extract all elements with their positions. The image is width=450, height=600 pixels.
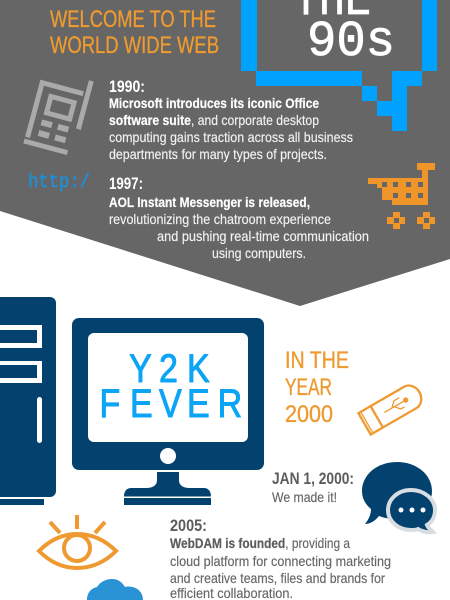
icon: eye xyxy=(39,515,116,568)
text block: 1990: Microsoft introduces its iconic Office xyxy=(109,95,319,111)
icon: monitor with Y2K fever screen xyxy=(72,318,264,505)
text block: 1997 xyxy=(109,174,369,261)
speech bubble: the 90s: 90s xyxy=(307,14,395,71)
screen title: Y2K fever: FEVER xyxy=(99,380,242,426)
icon: cloud xyxy=(87,579,143,600)
text block: 1997: using computers. xyxy=(212,245,306,261)
text block: 1997: AOL Instant Messenger is released, xyxy=(109,194,310,210)
icon: chat bubbles xyxy=(362,462,435,532)
text block: 2005 xyxy=(170,516,391,600)
screen title: Y2K fever xyxy=(99,345,242,426)
panel: grey 90s section xyxy=(0,0,450,306)
heading: in the year 2000: IN THE xyxy=(285,347,349,374)
icon: http text: http:/ xyxy=(28,171,90,193)
text block: Jan 1 2000: JAN 1, 2000: xyxy=(272,469,354,488)
text block: 1997: and pushing real-time communication xyxy=(157,228,369,244)
heading: in the year 2000: 2000 xyxy=(285,401,333,428)
text block: 1990: computing gains traction across all business xyxy=(109,129,353,145)
heading: in the year 2000 xyxy=(285,347,349,428)
icon: USB stick xyxy=(358,381,426,435)
text block: 2005: 2005: xyxy=(170,516,207,535)
heading: in the year 2000: YEAR xyxy=(285,374,332,401)
text block: 1990: 1990: xyxy=(109,77,145,96)
icon: computer tower xyxy=(0,297,56,505)
text block: 2005: and creative teams, files and brands for xyxy=(170,570,385,586)
text block: Jan 1 2000 xyxy=(272,469,354,505)
screen title: Y2K fever: Y2K xyxy=(129,345,210,391)
text block: 2005: WebDAM is founded, providing a xyxy=(170,535,350,551)
heading: welcome to the world wide web xyxy=(50,6,219,59)
heading: welcome to the world wide web: WORLD WIDE WEB xyxy=(50,32,219,59)
text block: Jan 1 2000: We made it! xyxy=(272,489,337,505)
speech bubble: the 90s xyxy=(241,0,437,131)
text block: 1990: departments for many types of projects. xyxy=(109,146,327,162)
text block: 1997: revolutionizing the chatroom experience xyxy=(109,211,331,227)
icon: mobile phone xyxy=(23,68,94,157)
text block: 1990 xyxy=(109,77,353,162)
heading: welcome to the world wide web: WELCOME TO THE xyxy=(50,6,216,33)
icon: shopping cart xyxy=(368,163,435,229)
text block: 1990: software suite, and corporate desktop xyxy=(109,112,319,128)
text block: 2005: cloud platform for connecting marketing xyxy=(170,553,391,569)
text block: 1997: 1997: xyxy=(109,174,143,193)
